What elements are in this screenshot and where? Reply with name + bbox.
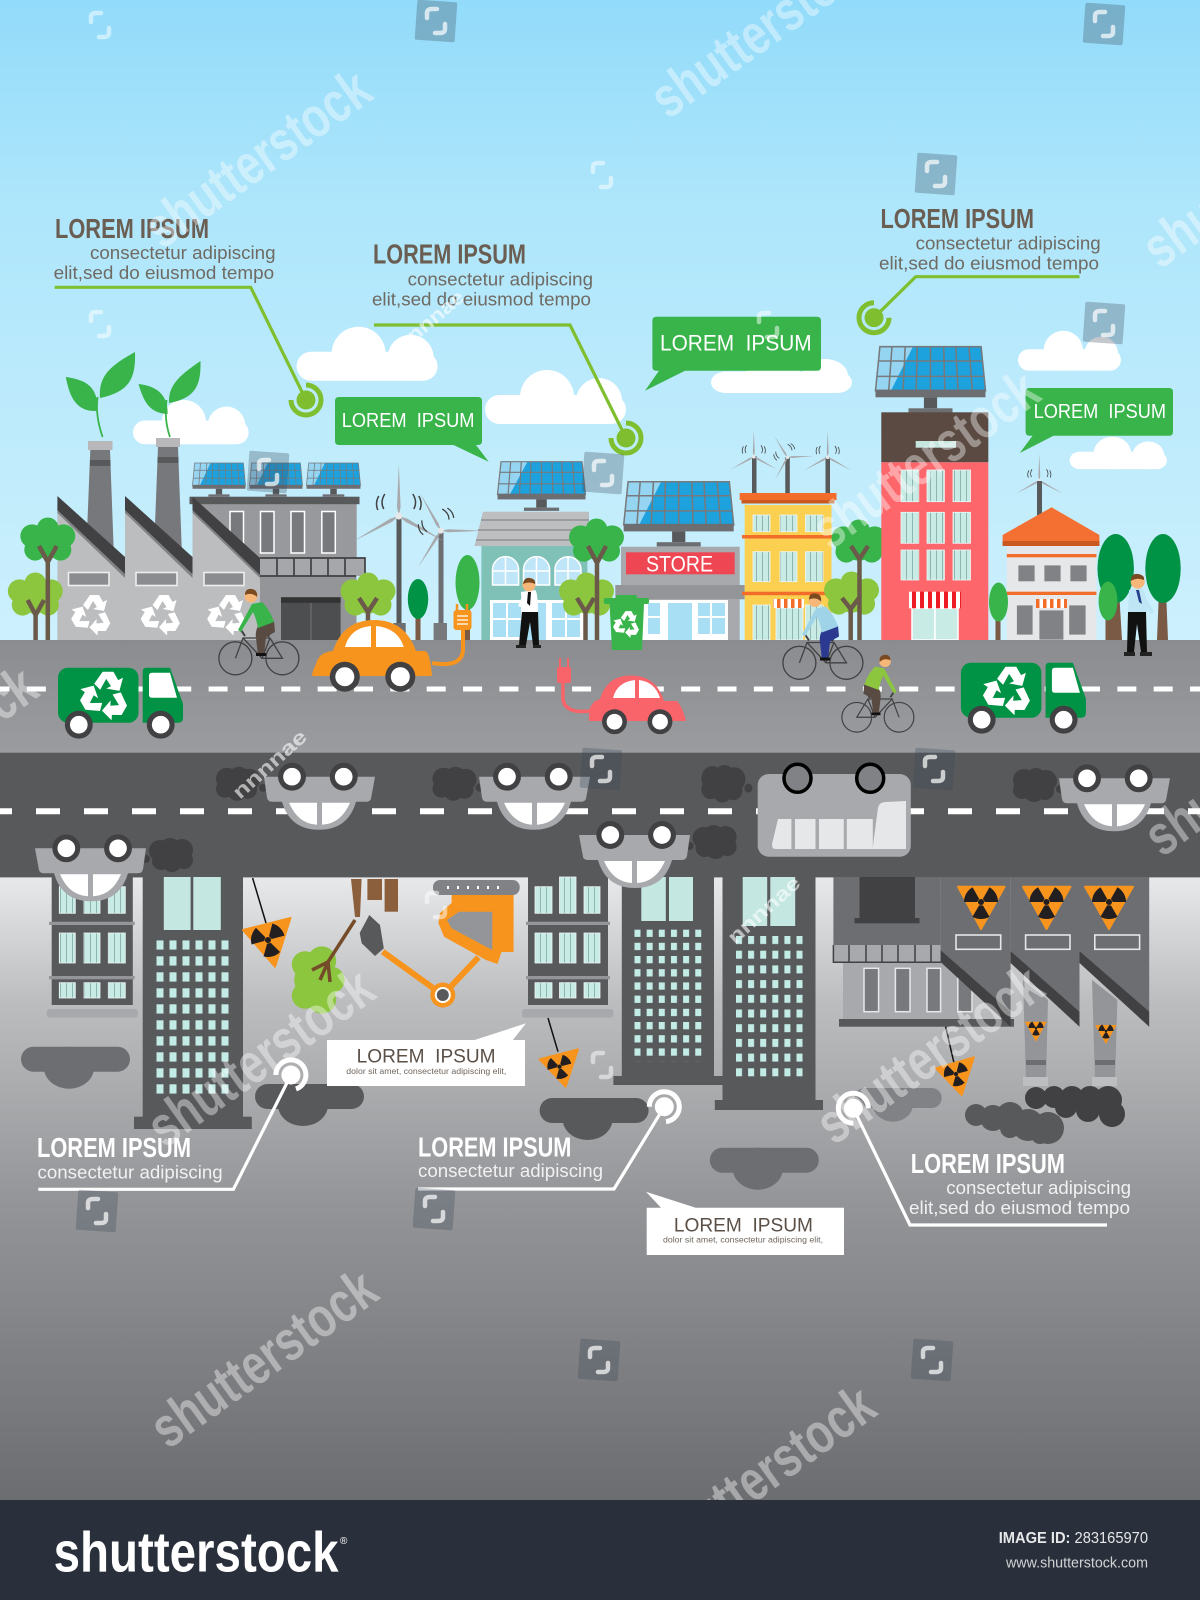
red tower — [876, 347, 988, 640]
uprooted tree — [292, 879, 398, 1014]
watermark text: nnnnae — [392, 286, 469, 356]
recycling truck left — [58, 668, 183, 739]
watermark text: shutterstock — [800, 357, 1051, 562]
speech bubble 2: LOREM IPSUM — [660, 331, 812, 356]
white callout box 2 — [646, 1192, 844, 1255]
callout: green top-centre: elit,sed do eiusmod tempo — [372, 290, 591, 310]
callout: green top-right: LOREM IPSUM — [880, 203, 1034, 234]
dark tower A — [134, 877, 252, 1129]
person with tie right — [1124, 574, 1154, 656]
callout: white bottom-right — [838, 1093, 1131, 1225]
car over tower — [579, 821, 690, 888]
hanging radiation sign 2 — [540, 1018, 578, 1087]
website: www.shutterstock.com — [1005, 1555, 1148, 1572]
radiation signs on factory — [958, 886, 1133, 929]
watermark text: nnnnae — [724, 872, 805, 949]
cyclist right — [842, 655, 914, 732]
dark building centre — [522, 877, 613, 1018]
recycling truck right — [961, 663, 1086, 734]
clouds — [133, 327, 1167, 469]
factory with solar roof — [57, 352, 365, 640]
dark tower C — [715, 877, 823, 1110]
store sign: STORE — [646, 552, 713, 577]
white callout box 1: dolor sit amet, consectetur adipiscing elit, — [346, 1066, 506, 1076]
white callout box 2: LOREM IPSUM — [674, 1216, 813, 1237]
callout: green top-centre: consectetur adipiscing — [408, 270, 593, 290]
callout: green top-right — [859, 203, 1101, 333]
polluted cars and smoke — [142, 763, 1170, 872]
watermark text: shutterstock — [636, 1372, 887, 1577]
excavator — [360, 880, 520, 1008]
cyclist left — [219, 589, 299, 675]
factory solar panels — [192, 463, 360, 497]
watermark logo squares — [76, 0, 1125, 1381]
watermark text: shutterstock — [138, 1256, 389, 1461]
footer logo: shutterstock — [54, 1520, 339, 1584]
trees centre — [824, 519, 886, 640]
watermark text: nnnnae — [229, 726, 312, 804]
callout: green top-left: consectetur adipiscing — [90, 243, 276, 263]
factory smog — [965, 1086, 1125, 1144]
green road — [0, 640, 1200, 753]
gray clouds — [21, 1047, 942, 1190]
polluted factory — [833, 877, 1149, 1086]
callout: white bottom-left: LOREM IPSUM — [37, 1132, 191, 1163]
callout: white bottom-centre: LOREM IPSUM — [418, 1132, 571, 1162]
watermark text: shutterstock — [132, 56, 383, 261]
callout: white bottom-centre: consectetur adipiscing — [418, 1161, 603, 1181]
callout: white bottom-right: LOREM IPSUM — [911, 1148, 1065, 1179]
upside-down saw-tooth sections — [941, 877, 1149, 1027]
polluted bus — [758, 764, 911, 857]
callout: green top-left — [54, 213, 321, 415]
white callout box 2: dolor sit amet, consectetur adipiscing elit, — [663, 1234, 823, 1244]
trees left — [8, 517, 480, 642]
hanging radiation sign 3 — [936, 1027, 974, 1095]
orange roof house — [1003, 454, 1099, 640]
footer bar — [0, 1500, 1200, 1600]
speech bubble 3: LOREM IPSUM — [1034, 401, 1166, 423]
lower city background — [0, 877, 1200, 1500]
person with tie left — [516, 578, 541, 648]
store — [615, 482, 745, 640]
speech bubble 1 — [335, 397, 489, 462]
callout: white bottom-left: consectetur adipiscing — [38, 1162, 223, 1182]
plant sprouts from chimneys — [66, 352, 201, 437]
chimneys upside down — [1023, 980, 1117, 1086]
recycling bin — [604, 595, 649, 650]
speech bubble 2 — [645, 317, 821, 391]
factory main building — [190, 497, 365, 640]
callout: green top-left: LOREM IPSUM — [55, 213, 209, 244]
callout: white bottom-left — [37, 1060, 306, 1189]
callout: white bottom-right: elit,sed do eiusmod tempo — [909, 1198, 1130, 1218]
polluted road — [0, 753, 1200, 877]
cyclist middle — [783, 593, 863, 679]
callout: white bottom-right: consectetur adipiscing — [946, 1178, 1131, 1198]
car over building — [35, 834, 146, 901]
callout: green top-right: elit,sed do eiusmod tempo — [879, 253, 1099, 273]
callout: green top-right: consectetur adipiscing — [916, 233, 1101, 253]
callout: green top-centre — [372, 238, 641, 453]
yellow apartment — [730, 423, 852, 640]
store sign — [626, 552, 735, 577]
sky background — [0, 0, 1200, 642]
dark tower B — [613, 877, 722, 1085]
chimneys — [87, 438, 182, 550]
callout: white bottom-centre — [418, 1092, 679, 1189]
dark building left — [47, 877, 138, 1018]
red electric car — [557, 658, 686, 734]
watermark text: shutterstock — [804, 952, 1055, 1157]
orange electric car — [312, 604, 472, 692]
trees right — [989, 534, 1181, 640]
callout: green top-centre: LOREM IPSUM — [373, 238, 526, 270]
wind turbines — [352, 464, 485, 640]
house with solar panel — [474, 462, 589, 640]
speech bubble 1: LOREM IPSUM — [342, 410, 474, 432]
speech bubble 3 — [1020, 388, 1173, 453]
image id: IMAGE ID: 283165970 — [999, 1530, 1148, 1547]
trees beside house — [559, 518, 624, 640]
watermark text: shutterstock — [135, 955, 386, 1160]
white callout box 1 — [327, 1023, 526, 1086]
white callout box 1: LOREM IPSUM — [357, 1047, 496, 1068]
callout: green top-left: elit,sed do eiusmod tempo — [54, 263, 274, 283]
saw-tooth sections — [57, 496, 260, 640]
hanging radiation sign 1 — [243, 878, 293, 967]
footer logo: ® — [340, 1536, 348, 1547]
